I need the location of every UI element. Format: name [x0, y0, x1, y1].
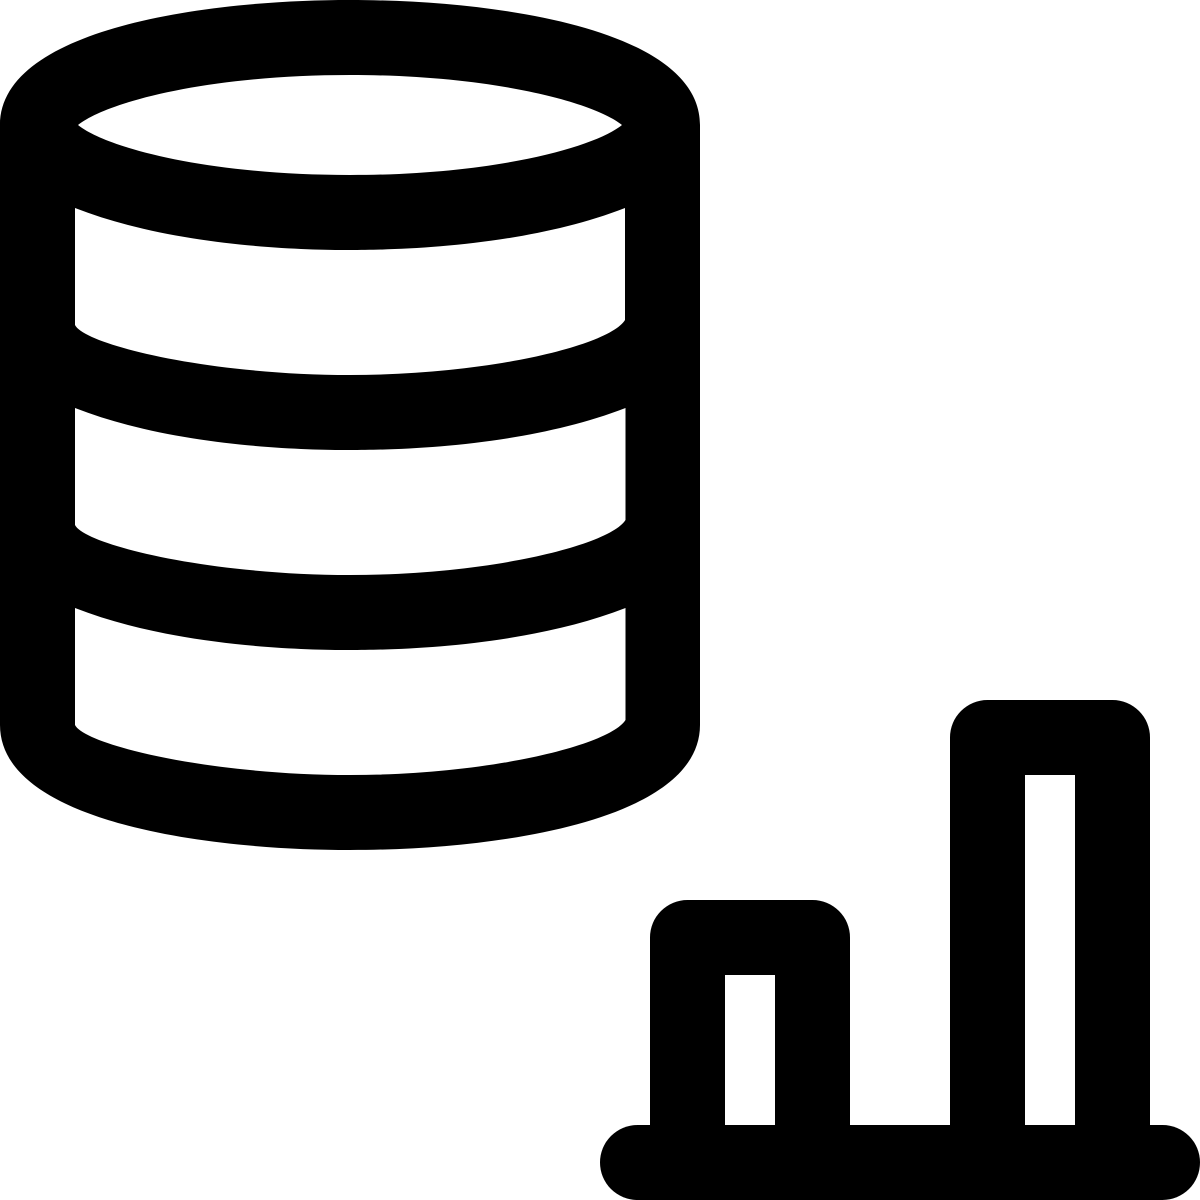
tall bar	[950, 700, 1150, 1140]
icon: bar chart	[600, 700, 1200, 1200]
baseline	[600, 1125, 1200, 1200]
icon: database cylinder	[0, 0, 700, 850]
short bar	[650, 900, 850, 1140]
